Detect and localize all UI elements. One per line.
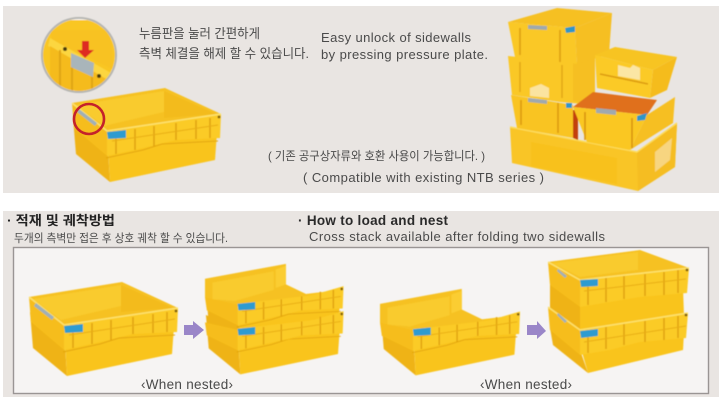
crate: upper xyxy=(548,250,689,333)
crate: small tilted xyxy=(595,47,677,98)
English compatibility note: ( Compatible with existing NTB series ) xyxy=(303,170,544,185)
Korean unlock text xyxy=(139,26,309,61)
English unlock text: by pressing pressure plate. xyxy=(321,47,488,62)
Korean unlock text: 측벽 체결을 해제 할 수 있습니다. xyxy=(139,46,309,61)
Korean nesting heading: · 적재 및 궤착방법 xyxy=(7,213,115,228)
panel: pressure plate unlock xyxy=(3,6,719,193)
Korean nesting description: 두개의 측벽만 접은 후 상호 궤착 할 수 있습니다. xyxy=(14,232,228,245)
Korean unlock text: 누름판을 눌러 간편하게 xyxy=(139,26,260,41)
English unlock text: Easy unlock of sidewalls xyxy=(321,30,472,45)
crate: lower band xyxy=(548,307,688,355)
image: single folded crate xyxy=(380,289,520,375)
icon: magnified pressure plate xyxy=(40,18,120,96)
image: two full crates stacked xyxy=(548,250,689,373)
crate: second tier xyxy=(508,56,595,105)
image: open yellow crate xyxy=(72,88,221,182)
English unlock text xyxy=(321,30,488,62)
arrow: second step xyxy=(527,321,546,339)
panel: how to load and nest xyxy=(3,211,719,397)
image: single open crate xyxy=(29,282,178,376)
icon: red highlight ring xyxy=(74,104,104,134)
image: two folded crates nested xyxy=(205,264,344,374)
caption: right when nested: ‹When nested› xyxy=(480,377,572,392)
crate: bottom large xyxy=(510,123,677,191)
caption: left when nested: ‹When nested› xyxy=(141,377,233,392)
English nesting description: Cross stack available after folding two sidewalls xyxy=(309,229,606,244)
Korean compatibility note: ( 기존 공구상자류와 호환 사용이 가능합니다. ) xyxy=(268,149,485,163)
crate: top xyxy=(508,8,612,64)
crate: open middle xyxy=(573,92,675,150)
icon: red down arrow xyxy=(77,41,94,58)
crate: third tier xyxy=(511,95,578,140)
arrow: first step xyxy=(184,321,204,339)
crate: lower base xyxy=(550,328,684,373)
English nesting heading: · How to load and nest xyxy=(298,213,448,228)
panel: nesting diagrams xyxy=(14,248,708,394)
image: stack of yellow crates xyxy=(508,8,677,191)
